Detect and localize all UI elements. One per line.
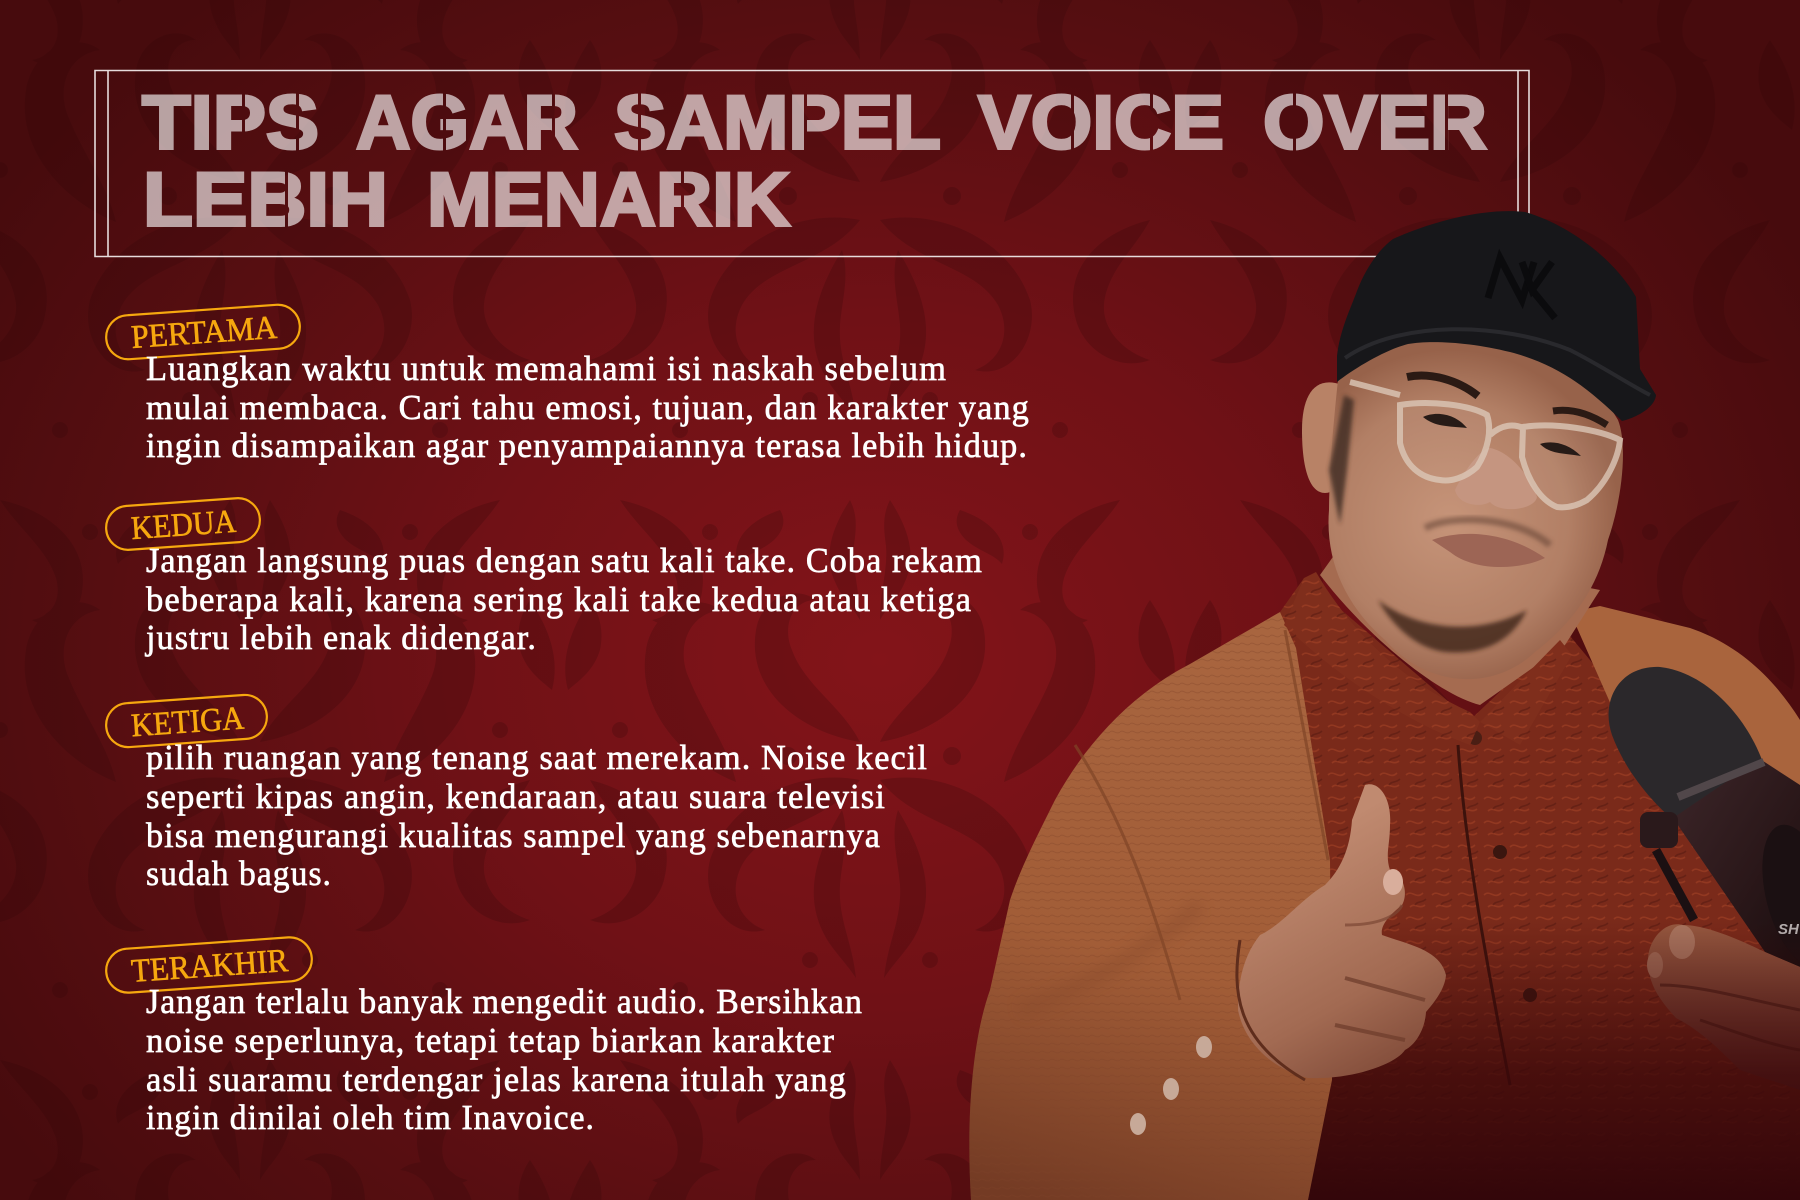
right hand holding mic: [1647, 924, 1800, 1090]
neck: [1320, 540, 1600, 705]
yoke: [1656, 850, 1694, 920]
paragraph: terakhir: [146, 982, 863, 1137]
paragraph: kedua: Jangan langsung puas dengan satu kali take. Coba rekam: [146, 541, 983, 580]
label pill: terakhir: [105, 936, 313, 994]
label pill: terakhir: TERAKHIR: [130, 943, 289, 990]
face: [1328, 321, 1623, 679]
microphone: SH: [1778, 921, 1800, 938]
paragraph: ketiga: [146, 738, 928, 893]
right cardigan shoulder: [1570, 606, 1800, 990]
tip 4: terakhir: [105, 936, 863, 1137]
mic end cap: [1750, 817, 1800, 973]
paragraph: terakhir: Jangan terlalu banyak mengedit audio. Bersihkan: [146, 982, 863, 1021]
shirt: [1280, 578, 1800, 1200]
ear: [1302, 382, 1345, 493]
title: VOICE: [978, 80, 1224, 166]
bottom fade over shirt and right hand: [1280, 920, 1800, 1200]
paragraph: terakhir: noise seperlunya, tetapi tetap biarkan karakter: [146, 1021, 835, 1060]
mic body: [1673, 759, 1800, 967]
paragraph: pertama: ingin disampaikan agar penyampaiannya terasa lebih hidup.: [146, 426, 1028, 465]
title: AGAR: [356, 80, 578, 166]
microphone: [1609, 667, 1800, 973]
title: [141, 94, 1488, 227]
paragraph: kedua: [144, 541, 983, 657]
paragraph: kedua: justru lebih enak didengar.: [144, 618, 537, 657]
nose: [1455, 448, 1537, 509]
paragraph: pertama: mulai membaca. Cari tahu emosi, tujuan, dan karakter yang: [146, 388, 1030, 427]
mouth: [1425, 520, 1550, 567]
glasses: [1350, 382, 1620, 507]
cuff buttons: [1130, 1036, 1212, 1135]
cap: [1337, 211, 1656, 421]
title frame: [95, 70, 1529, 256]
tip 3: ketiga: [105, 693, 928, 893]
sideburn: [1329, 395, 1354, 525]
title: TIPS: [142, 80, 319, 166]
paragraph: ketiga: seperti kipas angin, kendaraan, atau suara televisi: [146, 777, 886, 816]
cardigan and sleeve: [969, 612, 1332, 1200]
paragraph: terakhir: ingin dinilai oleh tim Inavoice.: [146, 1098, 595, 1137]
title: SAMPEL: [614, 80, 941, 166]
beard: [1378, 600, 1527, 653]
label pill: pertama: PERTAMA: [130, 310, 278, 356]
paragraph: ketiga: bisa mengurangi kualitas sampel yang sebenarnya: [146, 816, 881, 855]
shirt collar: [1284, 572, 1572, 745]
tip 2: kedua: [105, 497, 983, 657]
label pill: kedua: [105, 497, 261, 551]
label pill: pertama: [105, 303, 301, 361]
paragraph: pertama: Luangkan waktu untuk memahami isi naskah sebelum: [146, 349, 947, 388]
paragraph: pertama: [146, 349, 1030, 465]
photo: man with cap pointing, holding microphone: [969, 211, 1800, 1200]
paragraph: terakhir: asli suaramu terdengar jelas karena itulah yang: [146, 1060, 847, 1099]
cap logo: NY: [1488, 258, 1555, 318]
title: OVER: [1263, 80, 1487, 166]
pointing hand: [1237, 784, 1446, 1080]
label pill: kedua: KEDUA: [130, 504, 237, 547]
tip 1: pertama: [105, 303, 1030, 465]
paragraph: ketiga: sudah bagus.: [146, 854, 332, 893]
knob: [1640, 812, 1678, 848]
title: LEBIH: [143, 158, 388, 242]
eyes and brows: [1407, 376, 1607, 456]
label pill: ketiga: KETIGA: [130, 701, 245, 744]
paragraph: ketiga: pilih ruangan yang tenang saat merekam. Noise kecil: [146, 738, 928, 777]
label pill: ketiga: [105, 693, 268, 749]
foam head: [1609, 667, 1762, 820]
paragraph: kedua: beberapa kali, karena sering kali take kedua atau ketiga: [146, 580, 972, 619]
title: MENARIK: [427, 158, 790, 242]
